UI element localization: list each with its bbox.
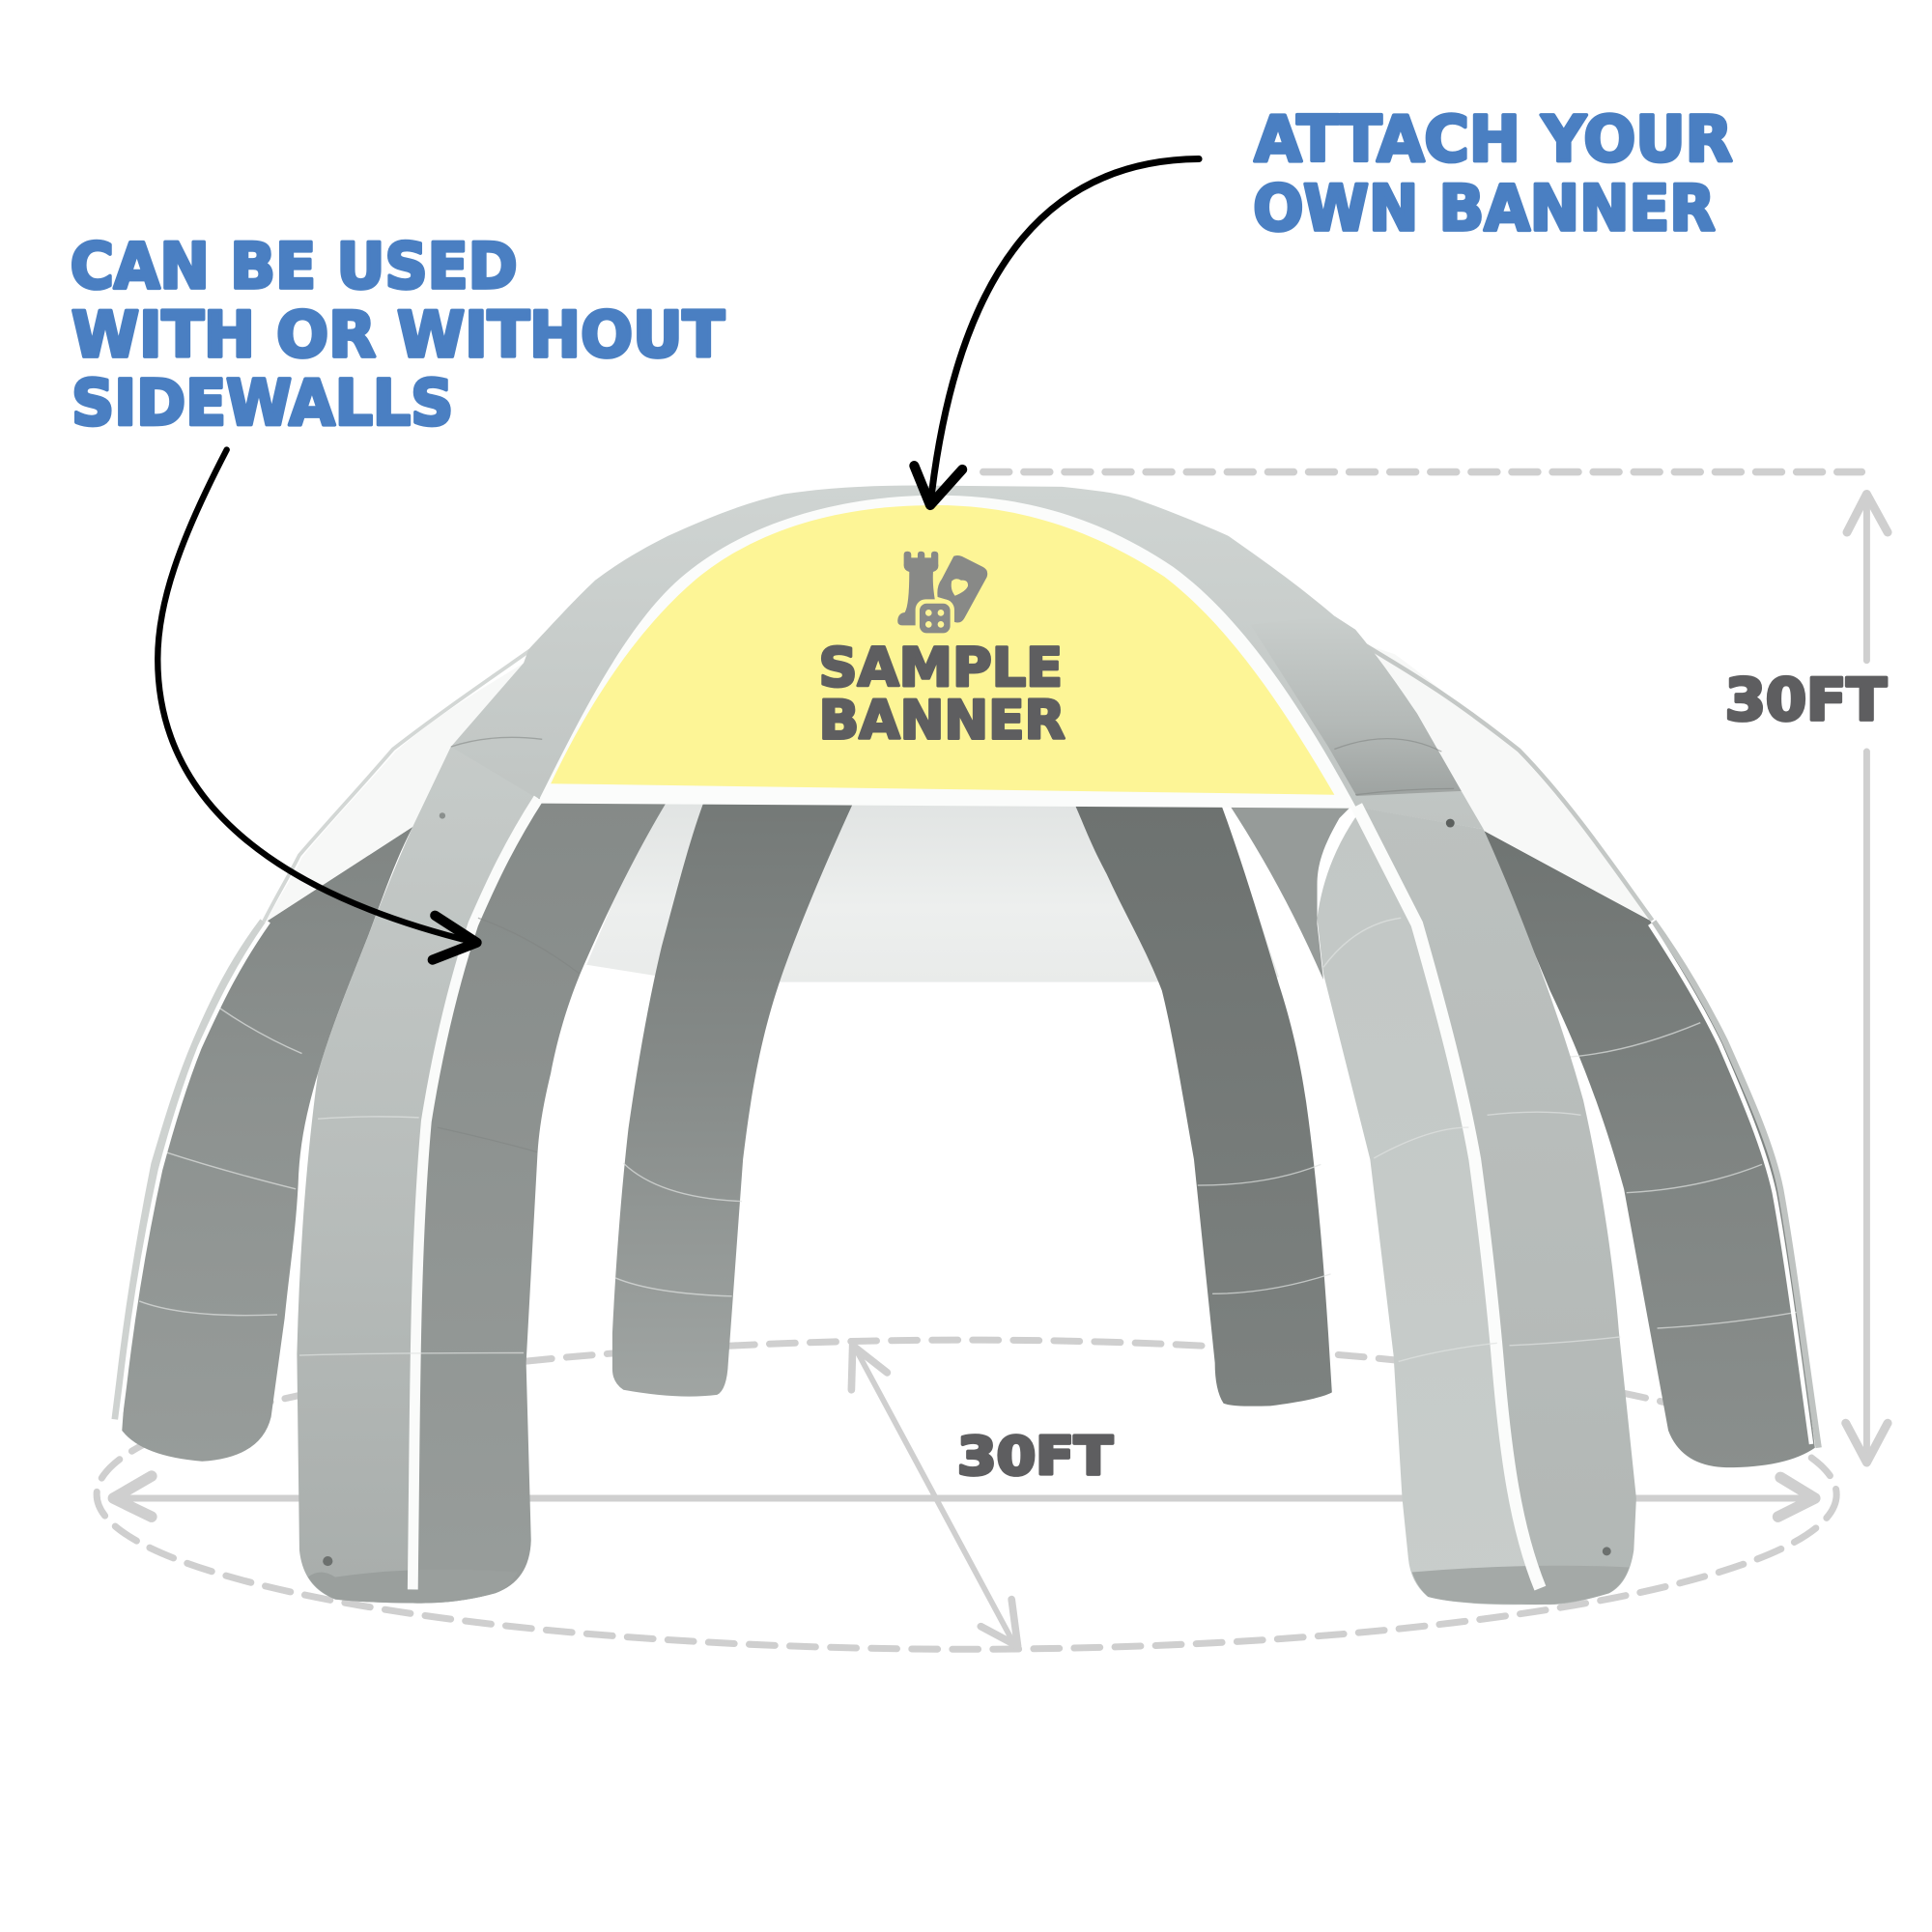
- lit side: [297, 747, 537, 1603]
- far left edge strips: [116, 922, 269, 1424]
- logo: [897, 552, 987, 638]
- white seam strip: [412, 799, 538, 1589]
- back canopy: [586, 796, 1279, 982]
- rook: [897, 552, 938, 625]
- banner white frame: [537, 496, 1356, 809]
- callout: attach banner: ATTACH YOUR: [1254, 103, 1732, 176]
- base shadow: [1412, 1566, 1629, 1605]
- arrow: height dimension: [1846, 494, 1888, 1463]
- left sidewall panel: [264, 650, 529, 922]
- front right leg: [1318, 806, 1636, 1605]
- banner text: BANNER: [819, 691, 1065, 753]
- label: diameter 30ft: 30FT: [957, 1426, 1113, 1487]
- wedge behind front right leg: [1229, 804, 1353, 980]
- callout: sidewalls: WITH OR WITHOUT: [71, 299, 724, 372]
- diameter ellipse: [97, 1340, 1836, 1649]
- card: [937, 555, 987, 623]
- callout: attach banner: OWN BANNER: [1253, 173, 1716, 245]
- inner panel: [1318, 815, 1543, 1605]
- far left leg: [122, 827, 412, 1462]
- front left leg: [297, 737, 670, 1604]
- back right leg: [1073, 801, 1332, 1406]
- right sidewall panel: [1354, 639, 1652, 921]
- yellow banner: [551, 505, 1334, 795]
- shaded side: [412, 796, 670, 1604]
- arrow: to banner: [914, 159, 1199, 505]
- arrow: to sidewall: [157, 450, 477, 960]
- back left leg: [612, 796, 856, 1397]
- outer panel: [1356, 807, 1636, 1605]
- callout: attach banner: [1253, 103, 1732, 245]
- arrow: width dimension: [113, 1476, 1815, 1517]
- card heart: [952, 579, 968, 596]
- banner text: [819, 638, 1065, 753]
- tent: [116, 486, 1819, 1605]
- die: [916, 599, 954, 638]
- far right leg: [1481, 829, 1815, 1467]
- dome tube: [412, 486, 1484, 829]
- label: height 30ft: 30FT: [1725, 668, 1887, 734]
- callout: sidewalls: CAN BE USED: [71, 231, 518, 303]
- base shadow: [308, 1570, 518, 1604]
- banner text: SAMPLE: [819, 638, 1063, 699]
- arrow: depth dimension: [851, 1346, 1018, 1646]
- height dashed guide: [983, 469, 1861, 475]
- upper right tube shading: [1251, 616, 1462, 796]
- white seam strip: [1356, 806, 1540, 1588]
- callout: sidewalls: SIDEWALLS: [71, 367, 453, 440]
- far right edge strips: [1650, 922, 1819, 1448]
- callout: sidewalls: [71, 231, 724, 440]
